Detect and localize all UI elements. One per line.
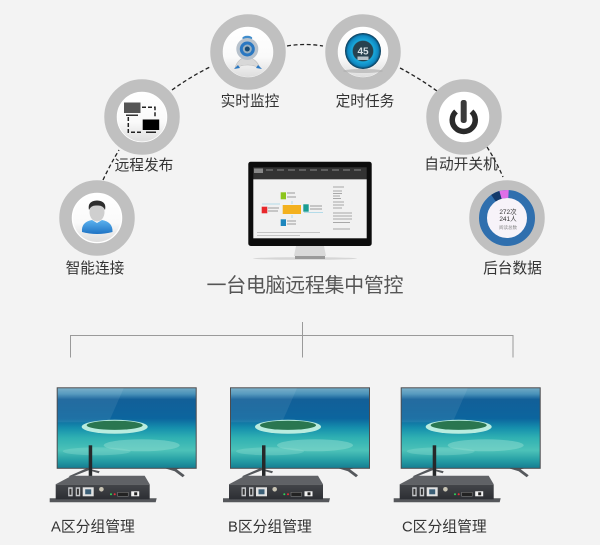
dashed connectors between features — [103, 44, 503, 180]
group A: TV and media box — [50, 387, 197, 536]
donut chart — [483, 194, 531, 242]
icon: power — [452, 100, 475, 131]
icon: webcam — [234, 36, 262, 69]
label: A区分组管理 — [51, 518, 135, 536]
donut chart: 241人 — [499, 215, 517, 223]
donut chart: 阅读总数 — [499, 224, 517, 231]
central monitor — [248, 162, 372, 260]
label: 远程发布 — [115, 157, 173, 174]
icon: user — [82, 200, 113, 234]
screen flow diagram — [257, 187, 352, 236]
label: 自动开关机 — [424, 156, 498, 173]
label: 实时监控 — [221, 93, 280, 110]
group C: TV and media box — [394, 387, 541, 536]
donut chart: 272次 — [499, 207, 517, 216]
label: 智能连接 — [66, 259, 125, 277]
icon: network monitors — [124, 102, 159, 133]
label: 后台数据 — [483, 260, 542, 277]
tree connector — [70, 322, 513, 358]
main heading: 一台电脑远程集中管控 — [206, 274, 404, 297]
feature: 实时监控 — [216, 20, 280, 110]
icon: timer dial: 45 — [357, 46, 369, 58]
feature: 后台数据 — [476, 186, 542, 277]
label: C区分组管理 — [402, 518, 487, 536]
feature: 定时任务 — [332, 20, 395, 110]
label: 定时任务 — [336, 93, 395, 110]
feature: 远程发布 — [110, 86, 174, 174]
group B: TV and media box — [223, 387, 370, 536]
label: B区分组管理 — [228, 518, 312, 536]
feature: 自动开关机 — [424, 86, 498, 173]
feature: 智能连接 — [66, 186, 128, 277]
